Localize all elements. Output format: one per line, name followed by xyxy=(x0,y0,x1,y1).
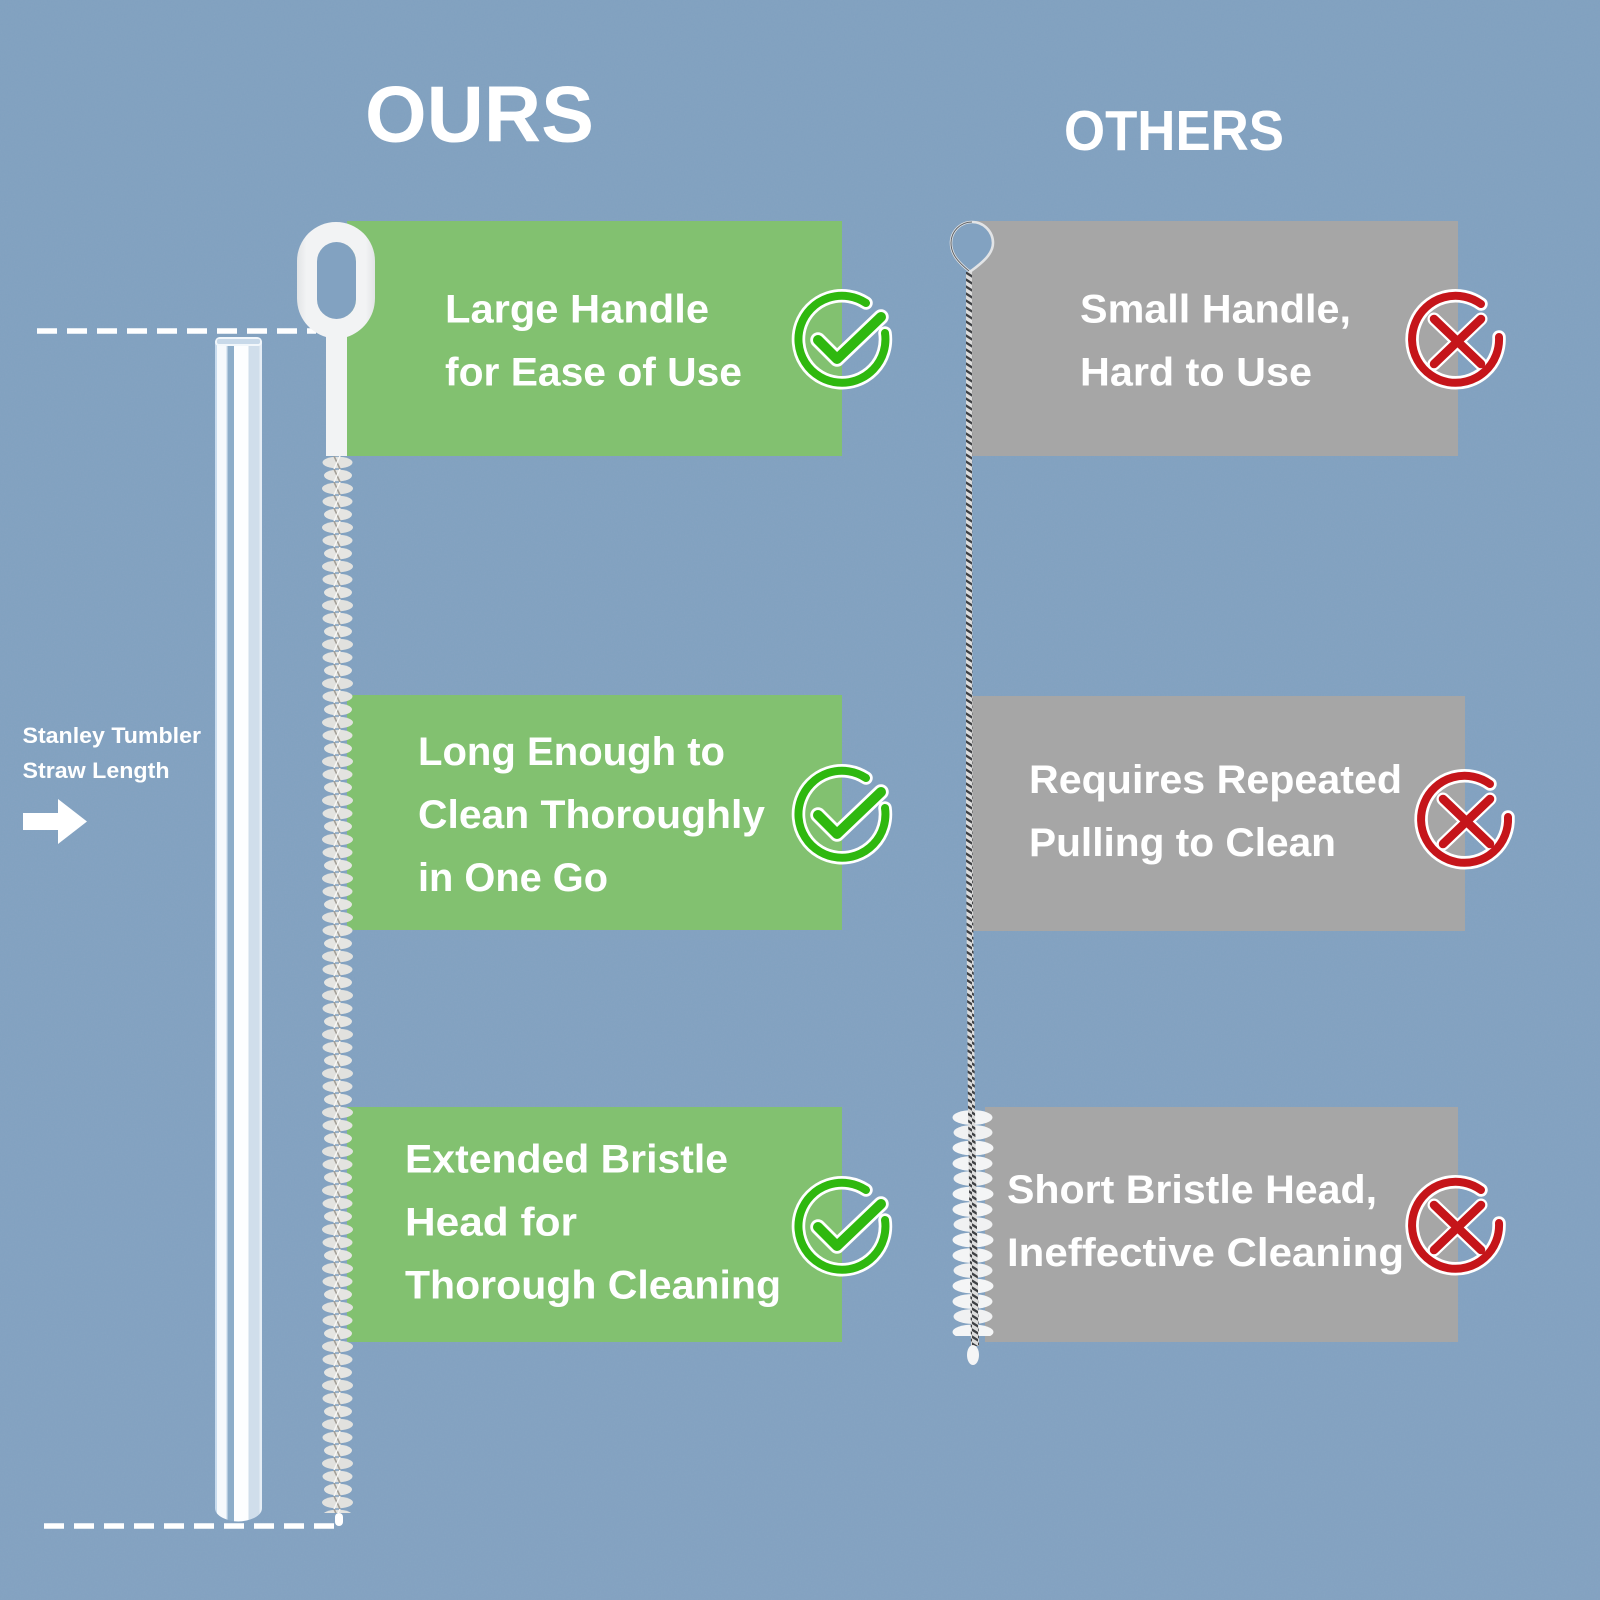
brush bristles xyxy=(322,456,354,1513)
straw xyxy=(215,337,262,1527)
label: Stanley Tumbler straw length xyxy=(22,723,201,783)
top dashed length line xyxy=(37,328,316,334)
text: long enough: in One Go xyxy=(418,856,608,900)
text: repeated pulling: Pulling to Clean xyxy=(1029,821,1336,865)
panel: ours length xyxy=(347,695,842,930)
text: repeated pulling: Requires Repeated xyxy=(1029,758,1402,802)
text: long enough xyxy=(418,730,766,900)
panel: others length xyxy=(972,696,1465,931)
arrow: pointing to straw xyxy=(23,799,87,844)
other brush xyxy=(951,222,994,1365)
label: Stanley Tumbler straw length: Stanley Tumbler xyxy=(22,723,201,748)
text: long enough: Long Enough to xyxy=(418,730,725,774)
text: short bristle: Ineffective Cleaning xyxy=(1007,1231,1404,1275)
text: small handle: Small Handle, xyxy=(1080,288,1351,332)
text: large handle xyxy=(445,288,742,395)
text: large handle: Large Handle xyxy=(445,288,709,332)
icon: cross mark 1 xyxy=(1412,296,1499,383)
text: extended bristle: Thorough Cleaning xyxy=(405,1264,781,1308)
icon: cross mark 3 xyxy=(1412,1182,1499,1269)
twisted wire xyxy=(966,272,979,1346)
text: repeated pulling xyxy=(1029,758,1402,865)
text: extended bristle xyxy=(405,1138,781,1308)
text: short bristle xyxy=(1007,1168,1404,1275)
bristle head xyxy=(952,1110,994,1336)
icon: check mark 2 xyxy=(798,771,885,858)
text: extended bristle: Extended Bristle xyxy=(405,1138,728,1182)
title: ours: OURS xyxy=(365,70,594,158)
brush core wire xyxy=(333,456,341,1513)
title: others: OTHERS xyxy=(1064,99,1284,163)
text: short bristle: Short Bristle Head, xyxy=(1007,1168,1377,1212)
panel: ours bristle xyxy=(347,1107,842,1342)
panel: others bristle xyxy=(985,1107,1458,1342)
brush tip xyxy=(335,1513,343,1526)
text: long enough: Clean Thoroughly xyxy=(418,793,766,837)
bottom dashed length line xyxy=(44,1523,334,1529)
label: Stanley Tumbler straw length: Straw Length xyxy=(22,758,170,783)
text: extended bristle: Head for xyxy=(405,1201,577,1245)
panel: others handle xyxy=(972,221,1458,456)
icon: cross mark 2 xyxy=(1421,776,1508,863)
handle opening xyxy=(317,242,356,319)
our brush xyxy=(297,222,375,1526)
icon: check mark 3 xyxy=(798,1183,885,1270)
panel: ours handle xyxy=(347,221,842,456)
wire tip xyxy=(967,1345,979,1365)
icon: check mark 1 xyxy=(798,296,885,383)
text: small handle: Hard to Use xyxy=(1080,351,1312,395)
text: small handle xyxy=(1080,288,1351,395)
text: large handle: for Ease of Use xyxy=(445,351,742,395)
wire ring xyxy=(951,222,993,271)
brush handle xyxy=(297,222,375,456)
